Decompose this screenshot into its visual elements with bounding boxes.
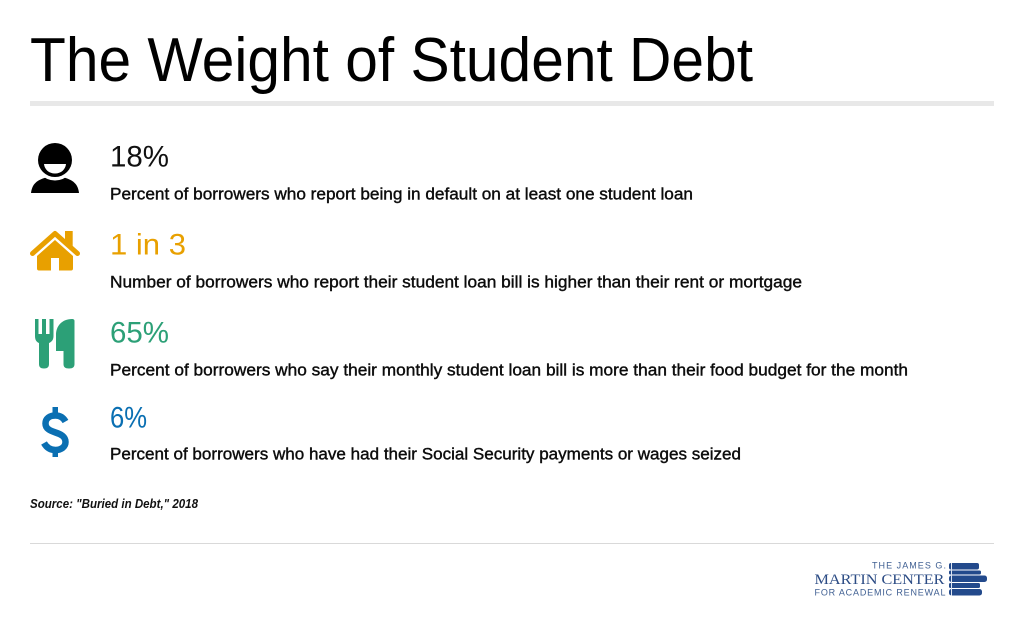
statistic: 1 in 3: 1 in 3 [110, 228, 186, 262]
stat row: seized [44, 402, 741, 464]
icon: book stack [949, 563, 987, 596]
title: The Weight of Student Debt [30, 26, 753, 95]
stat row: housing [32, 228, 802, 292]
statistic: 65%: 65% [110, 316, 169, 350]
stat row: food [35, 316, 908, 380]
logo: Martin Center: MARTIN CENTER [814, 572, 944, 588]
icon: house [32, 231, 78, 270]
description: Percent of borrowers who report being in default on at least one student loan [110, 186, 693, 204]
icon: dollar sign [44, 407, 66, 457]
logo: Martin Center: THE JAMES G. [872, 560, 946, 570]
description: Percent of borrowers who say their monthly student loan bill is more than their food budget for the month [110, 362, 908, 380]
source note: Source: "Buried in Debt," 2018 [30, 497, 198, 511]
description: Percent of borrowers who have had their Social Security payments or wages seized [110, 446, 741, 464]
icon: fork and knife [35, 319, 74, 368]
logo: Martin Center: FOR ACADEMIC RENEWAL [814, 588, 946, 598]
icon: person [31, 140, 79, 193]
stat row: default [31, 140, 693, 204]
statistic: 6%: 6% [110, 402, 147, 434]
statistic: 18%: 18% [110, 140, 169, 174]
logo: Martin Center [814, 560, 987, 598]
description: Number of borrowers who report their student loan bill is higher than their rent or mortgage [110, 274, 802, 292]
